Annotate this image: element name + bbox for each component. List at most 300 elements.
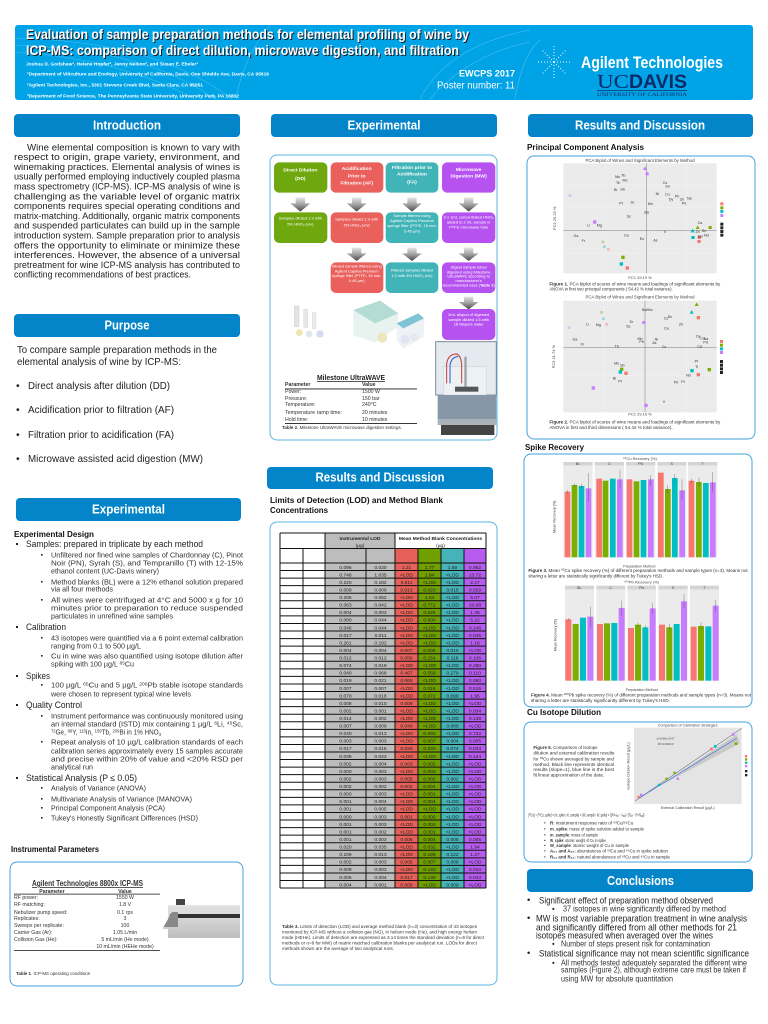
table 3: LOD and method blank data: 0.192	[374, 640, 387, 646]
table 3: LOD and method blank data: 0.033	[469, 746, 481, 752]
table 3: LOD and method blank data: 0.009	[339, 588, 352, 594]
table 3: LOD and method blank data: 0.017	[339, 633, 352, 639]
table 3: LOD and method blank data: 0.004	[339, 610, 352, 616]
introduction text: usually performed employing inductively coupled plasma	[14, 172, 241, 183]
poster title	[26, 26, 469, 58]
chart: 65Cu recovery bars: T	[702, 462, 705, 466]
flow column: microwave digestion: PTFE microwave tube	[449, 225, 489, 230]
table 3: LOD and method blank data: 0.002	[339, 784, 352, 790]
table 3: LOD and method blank data: 0.030	[374, 565, 387, 571]
table 3: LOD and method blank data: 0.013	[374, 852, 387, 858]
experimental design bullet list	[16, 539, 244, 823]
chart: PCA biplot PC1 vs PC2: Ga	[574, 234, 579, 238]
experimental design bullet list: 45	[227, 721, 233, 727]
table 3: LOD and method blank data: <LOD	[446, 844, 459, 850]
UC Davis logo: UNIVERSITY OF CALIFORNIA	[597, 92, 687, 98]
table 3: LOD and method blank data: 0.042	[374, 603, 387, 609]
image: Captiva filter boxes	[353, 301, 424, 348]
conclusions bullet list: using MW for absolute quantitation	[561, 975, 673, 984]
figure 1 caption: ANOVA in first two principal components ( 54.42 % total variance).	[549, 287, 673, 292]
table 3: LOD and method blank data: 0.020	[423, 588, 436, 594]
flow column: acidification prior to filtration: 0.45 µm)	[349, 278, 365, 283]
panel: limits of detection table	[270, 522, 497, 985]
table 3: LOD and method blank data: <LOD	[400, 799, 413, 805]
chart: 208Pb recovery bars: C	[609, 586, 612, 590]
chart: PCA biplot PC1 vs PC2: Dy	[669, 197, 673, 201]
table 1: ICP-MS operating conditions: 5 mL/min (He mode)	[101, 937, 149, 943]
table 3: LOD and method blank data: <LOD	[400, 633, 413, 639]
chart: PCA biplot PC1 vs PC2: Mo	[615, 175, 620, 179]
table 3: LOD and method blank data: 0.600	[423, 618, 436, 624]
UC Davis logo: DAVIS	[629, 72, 687, 93]
table 3: LOD and method blank data: 0.012	[374, 656, 387, 662]
table 3: LOD and method blank data: 0.014	[339, 716, 352, 722]
experimental design bullet list: and precise within 20% of value and <20% RSD per	[51, 755, 244, 764]
heading: experimental	[16, 498, 241, 521]
chart: PCA biplot PC1 vs PC3: Tb	[615, 344, 619, 348]
image: syringe filters	[294, 306, 324, 338]
table 3: LOD and method blank data: <LOD	[423, 663, 436, 669]
table 3: LOD and method blank data: 0.001	[374, 882, 387, 888]
heading: conclusions	[527, 869, 753, 892]
table 3: LOD and method blank data: <LOD	[400, 739, 413, 745]
table 3: LOD and method blank data: 0.013	[374, 731, 387, 737]
table 3: LOD and method blank data: <LOD	[446, 792, 459, 798]
chart: PCA biplot PC1 vs PC2: Sm	[698, 234, 703, 238]
table 3: LOD and method blank data: <LOD	[446, 814, 459, 820]
experimental design bullet list: 159	[95, 729, 102, 735]
table 3: LOD and method blank data: 0.515	[469, 686, 481, 692]
chart: 208Pb recovery bars: S	[672, 586, 675, 590]
table 2: Milestone UltraWAVE settings: Pressure:	[285, 396, 307, 402]
table 3: LOD and method blank data: 1.84	[425, 572, 435, 578]
chart: PCA biplot PC1 vs PC3: Bi	[613, 376, 616, 380]
table 3: LOD and method blank data: 0.007	[400, 648, 413, 654]
experimental design bullet list: an internal standard (ISTD) mix containing 1 µg/L	[51, 720, 216, 729]
chart: 65Cu recovery bars: C	[608, 462, 611, 466]
experimental design bullet list: 100 µg/L	[51, 681, 80, 690]
introduction text: challenging as the variable level of organic matrix	[14, 191, 240, 202]
chart: PCA biplot PC1 vs PC2: Zn	[696, 230, 700, 234]
table 3: LOD and method blank data: 0.004	[374, 875, 387, 881]
table 3: LOD and method blank data: <LOD	[400, 618, 413, 624]
table 3: LOD and method blank data: 0.006	[400, 837, 413, 843]
chart: PCA biplot PC1 vs PC2: Bi	[614, 188, 617, 192]
flow column: acidification prior to filtration: syringe filter (PTFE, 15 mm,	[332, 273, 381, 278]
table 3: LOD and method blank data: 0.009	[400, 701, 413, 707]
experimental design bullet list: 206	[139, 682, 148, 688]
table 3: LOD and method blank data: 0.001	[339, 837, 352, 843]
panel: conclusions	[527, 869, 753, 984]
table 3: LOD and method blank data: 0.017	[400, 875, 413, 881]
flow column: acidification prior to filtration: Acidification	[342, 166, 372, 172]
table 3: LOD and method blank data: 5.22	[470, 618, 480, 624]
experimental design bullet list: Cu	[125, 660, 134, 669]
figure 5 caption: 65	[540, 756, 543, 760]
chart: PCA biplot PC1 vs PC3	[551, 294, 723, 416]
figure 2 caption	[549, 420, 721, 430]
table 2: Milestone UltraWAVE settings: Table 2. Milestone UltraWAVE microwave digestion settings.	[282, 425, 402, 430]
purpose text: elemental analysis of wine by ICP-MS:	[17, 356, 181, 368]
table 3: LOD and method blank data: <LOD	[446, 595, 459, 601]
table 3: LOD and method blank data: 0.020	[339, 844, 352, 850]
chart: PCA biplot PC1 vs PC2: Mo	[622, 178, 628, 182]
table 3: LOD and method blank data: 0.018	[423, 686, 436, 692]
table 3: LOD and method blank data: 0.122	[446, 852, 459, 858]
table 3: LOD and method blank data: 0.080	[446, 724, 459, 730]
table 1: ICP-MS operating conditions: RF power:	[14, 895, 38, 901]
table 3: LOD and method blank data: <LOD	[423, 754, 436, 760]
equation variable definitions: •	[544, 843, 546, 848]
flow column: filtration prior to acidification: 1:2 with 5% HNO₃ (v/v)	[391, 273, 433, 278]
flow column: acidification prior to filtration	[331, 162, 383, 293]
table 3: LOD and method blank data: 0.002	[339, 708, 352, 714]
experimental design bullet list: Quality Control	[26, 700, 82, 710]
table 3: LOD and method blank data: 0.099	[446, 693, 459, 699]
table 3: LOD and method blank data: 0.116	[447, 656, 459, 662]
equation variable definitions: m_sample: mass of sample	[550, 833, 599, 838]
table 3: LOD and method blank data: <LOD	[423, 633, 436, 639]
heading: introduction: Introduction	[93, 118, 161, 132]
table 3: LOD and method blank data: <LOD	[469, 860, 482, 866]
figure 3 caption: Figure 3. Mean	[528, 568, 560, 573]
experimental design bullet list: Noir (PN), Syrah (S), and Tempranillo (T) with 12-15%	[51, 559, 243, 568]
flow column: microwave digestion: 18 Mapure water	[454, 322, 484, 327]
table 3: LOD and method blank data: 0.003	[374, 776, 387, 782]
figure 4 caption: Pb spike recovery (%) of different preparation methods and sample types (n=3). Means not	[569, 692, 752, 697]
table 3: LOD and method blank data: 0.003	[374, 837, 387, 843]
chart: 65Cu recovery bars: Mean Recovery (%)	[552, 501, 556, 533]
table 3 caption	[282, 924, 485, 951]
table 3: LOD and method blank data: 0.019	[339, 678, 352, 684]
table 3: LOD and method blank data: 0.009	[374, 724, 387, 730]
table 3: LOD and method blank data: <LOD	[446, 708, 459, 714]
heading: experimental middle column	[271, 114, 497, 137]
chart: calibration comparison scatter: Comparison of Calibration Strategies	[658, 723, 718, 727]
experimental design bullet list: 65	[120, 661, 125, 667]
table 3: LOD and method blank data: 0.001	[339, 822, 352, 828]
table 3: LOD and method blank data: <LOD	[469, 701, 482, 707]
table 3: LOD and method blank data: <LOD	[400, 686, 413, 692]
table 3: LOD and method blank data: <LOD	[400, 603, 413, 609]
chart: calibration comparison scatter: y=0.96x+0.07	[657, 736, 675, 740]
chart: 65Cu recovery bars: S	[670, 462, 673, 466]
table 3: LOD and method blank data: 0.002	[423, 761, 436, 767]
table 3: LOD and method blank data: 0.007	[339, 686, 352, 692]
table 3: LOD and method blank data: 0.280	[469, 663, 481, 669]
conclusions bullet list: 37 isotopes in wine significantly differed by method	[563, 905, 726, 914]
table 3: LOD and method blank data: 0.001	[423, 829, 436, 835]
table 3: LOD and method blank data: 0.205	[339, 595, 352, 601]
table 3: LOD and method blank data: 0.005	[400, 776, 413, 782]
Agilent Technologies wordmark: Agilent Technologies	[581, 53, 723, 72]
table 3: LOD and method blank data: 0.011	[375, 633, 387, 639]
table 3: LOD and method blank data: 0.063	[339, 603, 352, 609]
table 3: LOD and method blank data: 0.074	[446, 746, 459, 752]
experimental design bullet list: via all four methods	[51, 585, 113, 594]
conference and poster number: EWCPS 2017	[459, 68, 515, 80]
chart: PCA biplot PC1 vs PC3: As	[652, 341, 657, 345]
experimental design bullet list: Y,	[72, 728, 79, 737]
chart: PCA biplot PC1 vs PC3: Na	[704, 337, 709, 341]
experimental design bullet list: minutes prior to preparation to reduce suspended	[51, 604, 243, 613]
panel: purpose	[14, 314, 240, 465]
figure 5 caption: for	[533, 756, 539, 761]
table 3: LOD and method blank data: 0.050	[469, 678, 481, 684]
heading: limits of detection: Concentrations	[270, 506, 329, 515]
table 3: LOD and method blank data: <LOD	[400, 663, 413, 669]
table 3: LOD and method blank data: <LOD	[400, 754, 413, 760]
table 3: LOD and method blank data: 0.029	[469, 588, 481, 594]
table 1: ICP-MS operating conditions: 10 mL/min (HEHe mode)	[96, 944, 154, 950]
panel: PCA biplots	[527, 156, 755, 439]
chart: PCA biplot PC1 vs PC3: Pt	[618, 379, 622, 383]
experimental design bullet list: particulates in unrefined wine samples	[51, 612, 173, 621]
experimental design bullet list: In,	[86, 728, 95, 737]
table 3: LOD and method blank data: <LOD	[446, 799, 459, 805]
table 3: LOD and method blank data: 0.008	[446, 860, 459, 866]
figure 3 caption: sharing a letter are statistically significantly different by Tukey's HSD.	[528, 574, 663, 579]
table 3: LOD and method blank data: 0.003	[374, 739, 387, 745]
table 3: LOD and method blank data: 0.001	[423, 792, 436, 798]
table 3: LOD and method blank data: 0.005	[446, 837, 459, 843]
table 3: LOD and method blank data: <LOD	[469, 724, 482, 730]
chart: PCA biplot PC1 vs PC2: Li	[587, 224, 590, 228]
table 3: LOD and method blank data: 0.003	[374, 814, 387, 820]
heading: Cu isotope dilution: Cu Isotope Dilution	[527, 708, 601, 717]
equation variable definitions: •	[544, 854, 546, 859]
table 3: LOD and method blank data: <LOD	[400, 625, 413, 631]
table 3: LOD and method blank data: <LOD	[400, 693, 413, 699]
table 3: LOD and method blank data: 1.94	[470, 844, 480, 850]
table 3: LOD and method blank data: 0.000	[339, 792, 352, 798]
table 3: LOD and method blank data: 0.004	[374, 799, 387, 805]
table 2: Milestone UltraWAVE settings: Parameter	[285, 382, 310, 388]
authors and affiliations: Joshua D. Godshaw¹, Helene Hopfer², Jenny Nelson³, and Susan E. Ebeler¹	[26, 62, 198, 66]
flow column: microwave digestion	[442, 162, 495, 340]
table 3: LOD and method blank data: 0.006	[339, 875, 352, 881]
figure 3 caption	[528, 568, 748, 579]
table 3: LOD and method blank data: <LOD	[400, 867, 413, 873]
chart: PCA biplot PC1 vs PC3: Sr	[630, 320, 634, 324]
chart: PCA biplot PC1 vs PC3: Ga	[573, 338, 578, 342]
table 3: LOD and method blank data: 0.003	[423, 822, 436, 828]
table 2: Milestone UltraWAVE settings: Temperature ramp time:	[285, 410, 342, 416]
table 3: LOD and method blank data: <LOD	[469, 792, 482, 798]
heading: limits of detection	[270, 496, 444, 515]
table 3: LOD and method blank data: <LOD	[446, 663, 459, 669]
table 1: ICP-MS operating conditions: Agilent Technologies 8800x ICP-MS	[32, 879, 144, 888]
table 3: LOD and method blank data: (µg)	[436, 543, 445, 549]
table 1: ICP-MS operating conditions: Parameter	[39, 889, 65, 895]
table 3: LOD and method blank data: 0.005	[469, 837, 481, 843]
experimental design bullet list: Instrument performance was continuously monitored using	[51, 712, 243, 721]
table 3: LOD and method blank data: 0.004	[446, 739, 459, 745]
table 3: LOD and method blank data: 0.110	[469, 671, 481, 677]
table 3: LOD and method blank data: 0.001	[374, 708, 387, 714]
table 3: LOD and method blank data: 0.003	[339, 739, 352, 745]
table 3: LOD and method blank data: 0.005	[374, 807, 387, 813]
chart: 65Cu recovery bars	[552, 456, 717, 569]
table 3: LOD and method blank data: 0.035	[374, 844, 387, 850]
experimental design bullet list: Repeat analysis of 10 µg/L calibration standards of each	[51, 738, 243, 747]
table 3: LOD and method blank data: <LOD	[400, 708, 413, 714]
figure 1 caption: Figure 1. PCA biplot of scores of wine means and loadings of significant elements by	[549, 281, 721, 286]
figure 1 caption	[549, 281, 721, 292]
table 3: LOD and method blank data: 0.005	[469, 739, 481, 745]
experimental design bullet list: Samples: prepared in triplicate by each method	[26, 539, 203, 549]
table 3: LOD and method blank data: <LOD	[469, 822, 482, 828]
table 1: ICP-MS operating conditions: Table 1. ICP-MS operating conditions	[16, 971, 91, 976]
flow column: acidification prior to filtration: Agilent Captiva Premium	[335, 268, 379, 273]
chart: PCA biplot PC1 vs PC3: Ca	[664, 326, 670, 330]
figure 4 caption: Figure 4. Mean	[531, 692, 563, 697]
chart: PCA biplot PC1 vs PC3: PCA Biplot of Wines and Significant Elements by Method	[586, 294, 695, 299]
table 3: LOD and method blank data: <LOD	[446, 754, 459, 760]
table 1: ICP-MS operating conditions: Nebulizer pump speed:	[14, 910, 67, 916]
flow column: acidification prior to filtration: Diluted sample filtered using	[332, 264, 382, 269]
equation variable definitions: •	[544, 838, 546, 843]
heading: experimental: Experimental	[92, 502, 165, 516]
table 3: LOD and method blank data: 0.018	[374, 693, 387, 699]
chart: 208Pb recovery bars: T	[703, 586, 706, 590]
table 3: LOD and method blank data: 0.015	[446, 588, 459, 594]
table 3: LOD and method blank data: <LOD	[423, 701, 436, 707]
heading: conclusions: Conclusions	[607, 874, 674, 888]
equation variable definitions: R: instrument response ratio of ⁶³Cu/⁶⁵Cu	[550, 821, 634, 826]
flow column: acidification prior to filtration: 5% HNO₃ (v/v)	[344, 223, 370, 228]
introduction text: pretreatment for wine ICP-MS analysis has contributed to	[14, 260, 240, 271]
chart: PCA biplot PC1 vs PC3: Dy	[696, 334, 701, 338]
experimental design bullet list: 209	[113, 729, 120, 735]
experimental design subheading: Experimental Design	[14, 530, 94, 539]
flow column: microwave digestion: digested using Milestone	[447, 269, 491, 274]
flow column: microwave digestion: 2 x 1mL concentrated HNO₃	[444, 215, 494, 220]
heading: purpose: Purpose	[104, 318, 150, 332]
heading: purpose	[14, 314, 240, 337]
table 3: LOD and method blank data: 0.003	[374, 610, 387, 616]
purpose text	[16, 344, 217, 465]
table 3: LOD and method blank data: <LOD	[400, 595, 413, 601]
chart: PCA biplot PC1 vs PC2: Pt	[619, 202, 623, 206]
equation variable definitions: •	[544, 827, 546, 832]
chart: PCA biplot PC1 vs PC3: Sn	[668, 315, 672, 319]
table 3: LOD and method blank data: 0.006	[423, 648, 436, 654]
table 3: LOD and method blank data: 0.003	[374, 792, 387, 798]
table 3: LOD and method blank data: 0.003	[400, 761, 413, 767]
table 2: Milestone UltraWAVE settings: 20 minutes	[362, 410, 388, 416]
table 3: LOD and method blank data: 0.056	[400, 656, 413, 662]
chart: PCA biplot PC1 vs PC2: Sc	[627, 214, 631, 218]
chart: PCA biplot PC1 vs PC2: Pd	[682, 202, 686, 206]
table 3: LOD and method blank data: 0.467	[400, 671, 413, 677]
experimental design bullet list: Sc,	[232, 720, 243, 729]
introduction text: interferences. However, the absence of a universal	[14, 250, 240, 261]
table 3: LOD and method blank data: 20.08	[469, 603, 481, 609]
table 3: LOD and method blank data: <LOD	[423, 640, 436, 646]
table 1: ICP-MS operating conditions: Carrier Gas (Ar):	[14, 930, 52, 936]
chart: PCA biplot PC1 vs PC3: Pb	[674, 381, 678, 385]
table 3: LOD and method blank data: 0.008	[339, 701, 352, 707]
table 3: LOD and method blank data: <LOD	[469, 776, 482, 782]
table 3: LOD and method blank data: 0.005	[400, 860, 413, 866]
chart: 208Pb recovery bars: Mean Recovery (%)	[554, 619, 558, 651]
panel: sample preparation flowchart	[270, 155, 497, 440]
table 2: Milestone UltraWAVE settings: 10 minutes	[362, 417, 388, 423]
flow column: microwave digestion: recommended uses (Table 2)	[443, 282, 495, 287]
chart: PCA biplot PC1 vs PC3: Li	[586, 322, 589, 326]
table 2: Milestone UltraWAVE settings: Milestone UltraWAVE	[317, 373, 385, 382]
table 3: LOD and method blank data: 0.001	[400, 814, 413, 820]
table 3: LOD and method blank data: 0.096	[339, 565, 352, 571]
table 3: LOD and method blank data: 0.065	[400, 678, 413, 684]
table 3: LOD and method blank data: 0.012	[339, 656, 352, 662]
table 3: LOD and method blank data: 0.010	[469, 867, 481, 873]
table 3: LOD and method blank data: 0.000	[339, 814, 352, 820]
table 3: LOD and method blank data: <LOD	[423, 580, 436, 586]
table 3: LOD and method blank data: 0.013	[400, 588, 413, 594]
table 2: Milestone UltraWAVE settings: Value	[362, 382, 376, 388]
chart: PCA biplot PC1 vs PC2: Pb	[675, 195, 679, 199]
chart: PCA biplot PC1 vs PC3: Sc	[626, 324, 631, 328]
table 3: LOD and method blank data: <LOD	[469, 648, 482, 654]
table 3: LOD and method blank data: 1.95	[470, 693, 480, 699]
chart: PCA biplot PC1 vs PC3: Ba/Mo	[642, 308, 653, 312]
table 3: LOD and method blank data: 0.032	[423, 844, 436, 850]
table 3: LOD and method blank data: 0.017	[339, 746, 352, 752]
table 3: LOD and method blank data: 13.72	[469, 572, 481, 578]
flow column: microwave digestion: UltraWAVE according to	[447, 274, 491, 279]
table 3: LOD and method blank data: 0.007	[423, 860, 436, 866]
figure 4 caption: sharing a letter are statistically significantly different by Tukey's HSD.	[531, 698, 670, 703]
experimental design bullet list: Statistical Analysis (P ≤ 0.05)	[26, 773, 137, 783]
table 3: LOD and method blank data: <LOD	[469, 829, 482, 835]
chart: PCA biplot PC1 vs PC2: Sn	[702, 229, 706, 233]
table 3: LOD and method blank data: 0.002	[423, 776, 436, 782]
experimental design bullet list: Method blanks (BL) were a 12% ethanol solution prepared	[51, 578, 243, 587]
figure 5 caption: Cu shown averaged by sample and	[543, 756, 614, 761]
table 3: LOD and method blank data: 0.009	[400, 882, 413, 888]
flow column: direct dilution: (DD)	[295, 176, 306, 182]
table 3: LOD and method blank data: 0.009	[339, 867, 352, 873]
chart: PCA biplot PC1 vs PC3: Sb	[620, 363, 625, 367]
chart: PCA biplot PC1 vs PC2: Ca	[624, 233, 630, 237]
flow column: filtration prior to acidification: 0.45 µm)	[404, 228, 421, 233]
conclusions bullet list: isotopes measured when averaged over the wines	[536, 930, 713, 942]
chart: PCA biplot PC1 vs PC3: Pt	[695, 360, 698, 364]
chart: 65Cu recovery bars: Preparation Method	[623, 565, 655, 569]
chart: PCA biplot PC1 vs PC2: Sr	[631, 201, 635, 205]
conclusions bullet list: and significantly differed from all other methods for 21	[536, 922, 737, 934]
table 1: ICP-MS operating conditions: 1.05 L/min	[113, 930, 137, 936]
heading: principal component analysis: Principal Component Analysis	[527, 143, 645, 152]
table 3: LOD and method blank data: <LOD	[469, 784, 482, 790]
introduction text: matrix-matching. Additionally, organic matrix components	[14, 211, 240, 222]
table 3: LOD and method blank data: <LOD	[446, 769, 459, 775]
header banner	[15, 25, 753, 100]
table 3: LOD and method blank data: 0.002	[339, 776, 352, 782]
chart: PCA biplot PC1 vs PC2: Na	[687, 197, 693, 201]
authors and affiliations: ¹Department of Viticulture and Enology, University of California, Davis, One Shields Ave, Davis, CA 95616	[27, 72, 269, 76]
chart: PCA biplot PC1 vs PC3: V	[663, 400, 666, 404]
table 3 caption: monitored by ICP-MS without a collision gas (NG), in helium mode (He), and high energy helium	[282, 930, 477, 934]
chart: PCA biplot PC1 vs PC3: Mg	[596, 323, 601, 327]
table 3: LOD and method blank data: <LOD	[469, 882, 482, 888]
equation variable definitions: R₆₃ and R₆₅: natural abundances of ⁶³Cu and ⁶⁵Cu in sample	[550, 854, 670, 859]
conclusions bullet list	[527, 895, 749, 984]
table 3: LOD and method blank data: <LOD	[400, 716, 413, 722]
table 3: LOD and method blank data: <LOD	[446, 610, 459, 616]
